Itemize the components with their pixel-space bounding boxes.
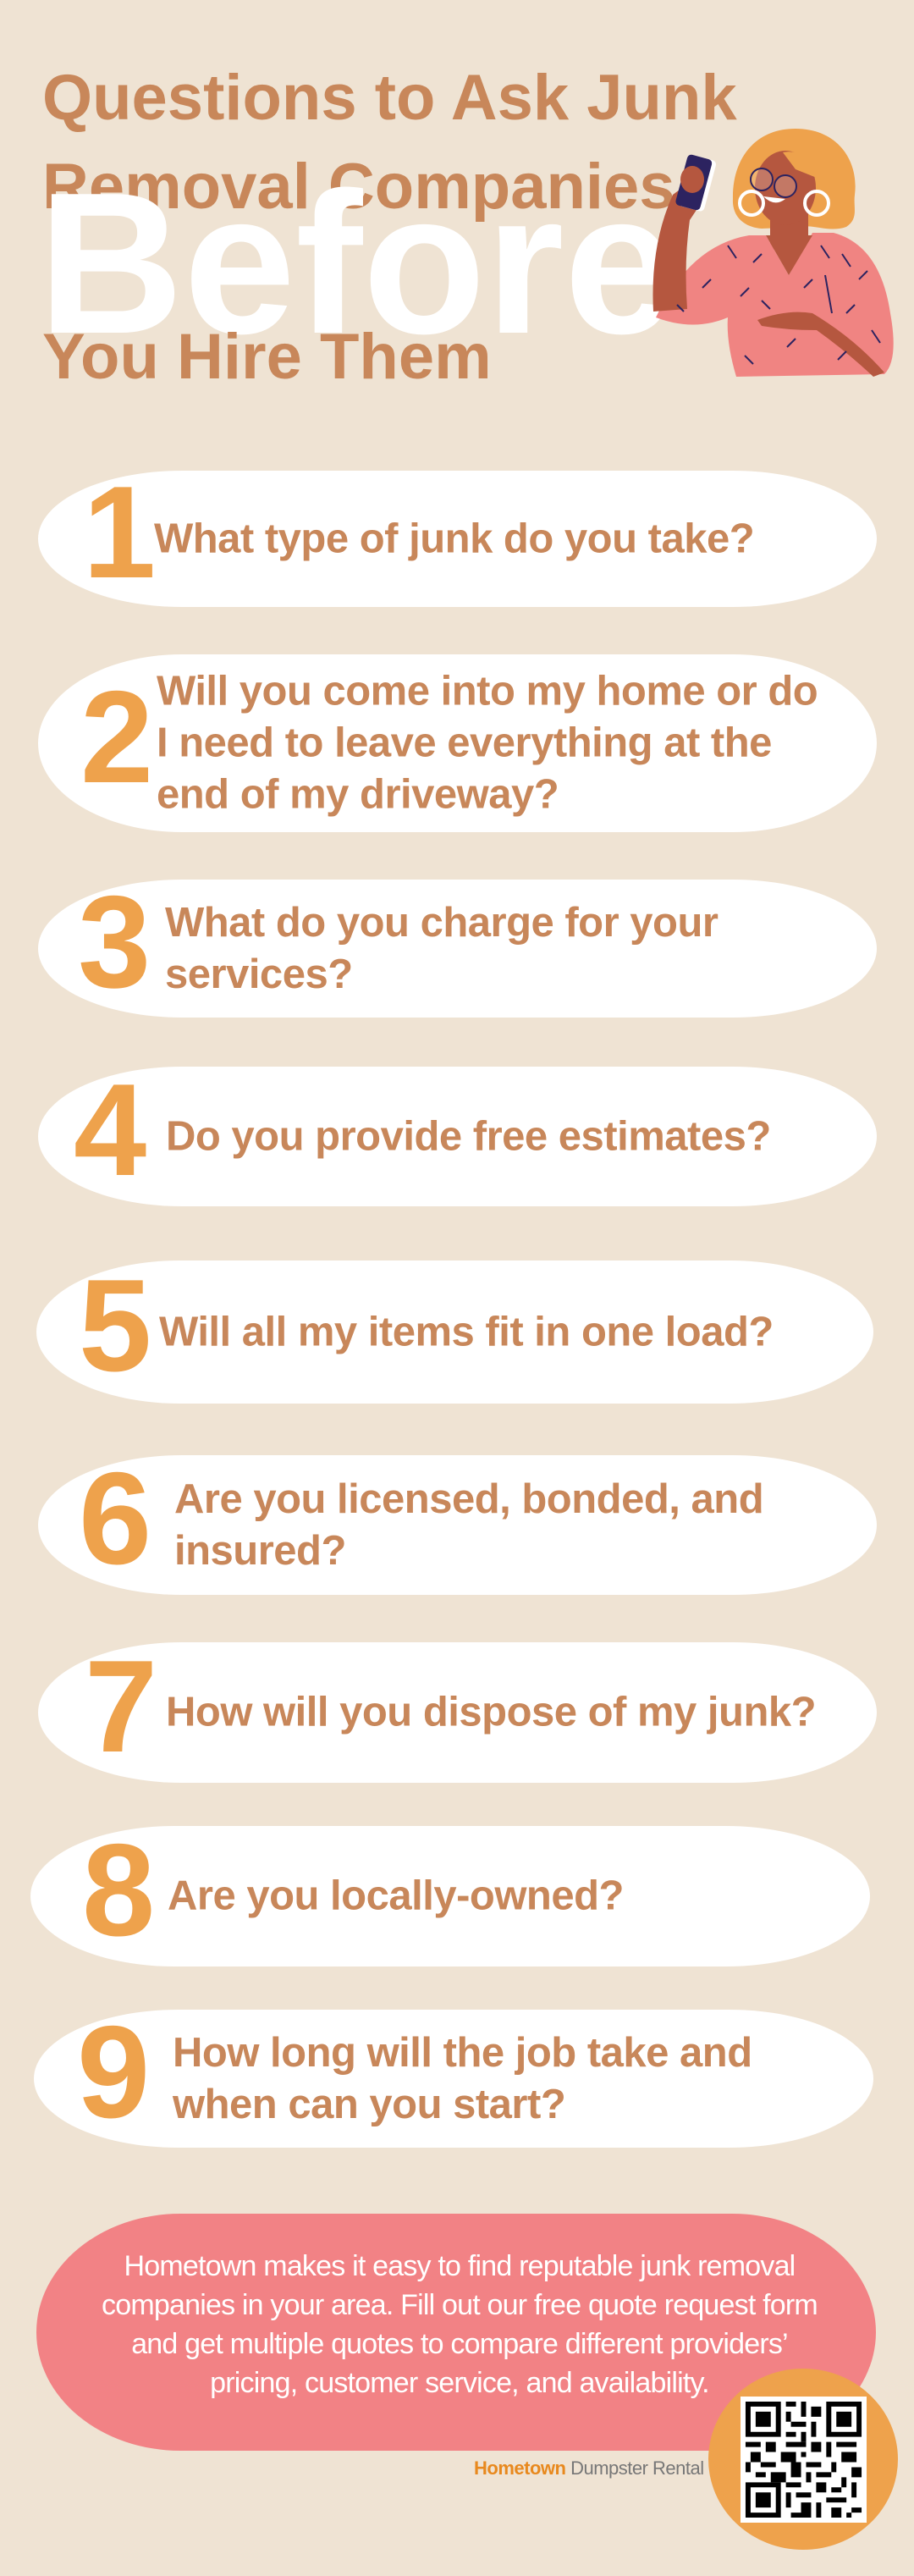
question 2 [38,654,877,832]
question 3: services? [165,952,353,997]
callout text [102,2250,818,2399]
QR code badge [708,2369,898,2550]
question 5: Will all my items fit in one load? [159,1309,774,1354]
question 1 [38,471,877,607]
question 1: What type of junk do you take? [154,516,754,561]
question 2: I need to leave everything at the [157,720,772,765]
question 1: 1 [83,459,156,605]
big word Before: Before [38,152,676,376]
question 9: How long will the job take and [173,2030,752,2076]
question 3: 3 [78,869,151,1015]
callout text: pricing, customer service, and availability. [210,2367,709,2399]
question 2: Will you come into my home or do [157,669,818,714]
illustration: woman with phone [653,129,894,377]
question 3: What do you charge for your [165,899,718,945]
question 5: 5 [79,1252,151,1398]
question 4: Do you provide free estimates? [166,1113,771,1159]
question 5 [36,1260,873,1404]
question 8 [30,1826,870,1966]
question 7: 7 [85,1633,157,1779]
question 7 [38,1642,877,1783]
question 8: Are you locally-owned? [168,1873,624,1918]
brand logo text: Hometown Dumpster Rental [474,2457,704,2479]
question 3 [38,880,877,1018]
question 4 [38,1067,877,1206]
title line 1: Questions to Ask Junk [42,62,737,134]
callout text: Hometown makes it easy to find reputable junk removal [124,2250,795,2282]
question 6: insured? [174,1527,346,1573]
question 4: 4 [74,1056,146,1203]
question 8: 8 [82,1817,155,1963]
callout text: companies in your area. Fill out our free quote request form [102,2289,818,2321]
question 9: 9 [77,1999,150,2145]
callout: Hometown description [36,2214,876,2451]
question 6 [38,1455,877,1595]
question 9: when can you start? [173,2081,565,2126]
question 7: How will you dispose of my junk? [166,1690,816,1735]
question 9 [34,2010,873,2148]
question 2: 2 [80,664,153,810]
question 6: 6 [79,1445,151,1591]
title line 3: You Hire Them [42,321,492,393]
question 6: Are you licensed, bonded, and [174,1476,763,1522]
question 2: end of my driveway? [157,772,559,818]
callout text: and get multiple quotes to compare different providers’ [131,2328,788,2360]
title line 2: Removal Companies [42,151,675,223]
